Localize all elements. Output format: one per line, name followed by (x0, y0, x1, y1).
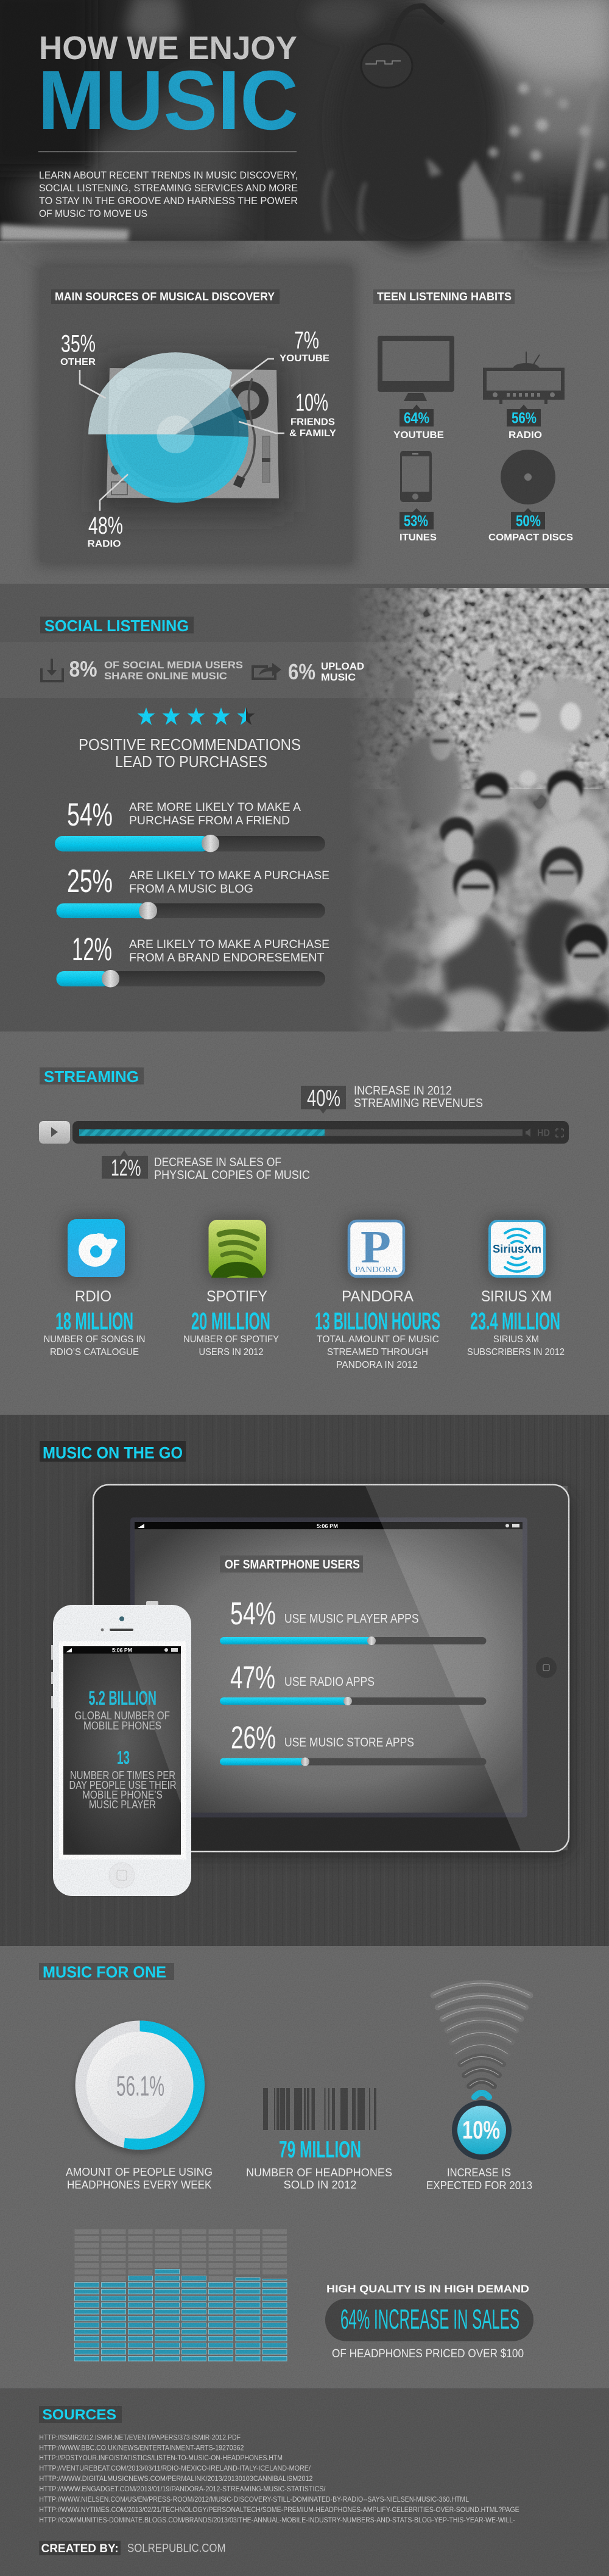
equalizer chart: filled cells (74, 2269, 287, 2361)
icon: barcode and 79 million: 79 MILLION (279, 2137, 361, 2163)
section: music for one (39, 1963, 533, 2361)
streaming progress bar (72, 1121, 569, 1144)
stat: 12 percent brand endorsement: 12% (72, 932, 112, 968)
stat: 5.2 billion mobile phones (74, 1687, 170, 1732)
pie slice: radio 48% (106, 434, 248, 503)
callout: radio 48% (88, 474, 128, 550)
icon: sirius xm logo (493, 1229, 541, 1272)
callout: other 35%: 35% (61, 330, 96, 357)
icon: rating stars (138, 707, 255, 725)
list of source urls: HTTP://COMMUNITIES-DOMINATE.BLOGS.COM/BRANDS/2013/03/THE-ANNUAL-MOBILE-INDUSTRY-NUMBERS-AND-STATS-BLOG-YEP-THIS-YEAR-WE-WILL- (39, 2516, 515, 2524)
smartphone: 5:06 PM (112, 1647, 132, 1654)
stat: 13 times per day: DAY PEOPLE USE THEIR (69, 1779, 177, 1791)
icon: pandora logo (355, 1222, 398, 1275)
callout: youtube 7% (231, 327, 329, 386)
stat: 54 percent music player apps: USE MUSIC PLAYER APPS (284, 1612, 419, 1626)
icon: compact disc (501, 450, 555, 504)
list of source urls: HTTP://VENTUREBEAT.COM/2013/03/11/RDIO-MEXICO-IRELAND-ITALY-ICELAND-MORE/ (39, 2464, 311, 2472)
gauge: 56.1 percent headphones every week: 56.1% (116, 2070, 164, 2102)
icon: share (253, 663, 281, 679)
intro text: SOCIAL LISTENING, STREAMING SERVICES AND MORE (39, 183, 298, 194)
stat: 13 times per day: MUSIC PLAYER (89, 1799, 156, 1811)
callout: high quality 64 percent increase in sales: HIGH QUALITY IS IN HIGH DEMAND (326, 2283, 529, 2295)
panel: main sources of musical discovery (37, 262, 356, 567)
app: sirius xm: SIRIUS XM (493, 1334, 539, 1345)
callout: other 35%: OTHER (60, 357, 96, 367)
stat: 26 percent music store apps: USE MUSIC STORE APPS (284, 1736, 414, 1750)
gauge: 56.1 percent headphones every week: HEADPHONES EVERY WEEK (67, 2179, 212, 2191)
stat: 54 percent friend: PURCHASE FROM A FRIEND (129, 814, 290, 827)
app: spotify: NUMBER OF SPOTIFY (183, 1334, 279, 1345)
gauge: 56.1 percent headphones every week (66, 2020, 213, 2191)
stat: 5.2 billion mobile phones: GLOBAL NUMBER OF (74, 1710, 170, 1722)
stat: 12 percent brand endorsement (56, 932, 329, 987)
icon: pandora logo: PANDORA (355, 1265, 398, 1275)
icon: barcode and 79 million: NUMBER OF HEADPHONES (246, 2167, 392, 2179)
app: rdio: NUMBER OF SONGS IN (44, 1334, 145, 1345)
section: social listening (0, 584, 609, 1039)
app: rdio (44, 1216, 145, 1357)
stat: itunes 53% (400, 508, 437, 543)
app: pandora (315, 1217, 440, 1370)
list of source urls: HTTP://WWW.ENGADGET.COM/2013/01/19/PANDORA-2012-STREAMING-MUSIC-STATISTICS/ (39, 2485, 326, 2493)
stat: 6 percent upload music: MUSIC (321, 672, 356, 683)
callout: 12 percent decrease: DECREASE IN SALES OF (154, 1156, 281, 1169)
stat: youtube 64%: YOUTUBE (393, 430, 444, 441)
stat: 6 percent upload music (288, 659, 364, 684)
stat: 6 percent upload music: 6% (288, 659, 315, 684)
app: rdio: 18 MILLION (55, 1308, 133, 1335)
title: How We Enjoy Music: HOW WE ENJOY (39, 30, 297, 66)
stat: 8 percent share online music: SHARE ONLINE MUSIC (104, 671, 227, 682)
app: pandora: TOTAL AMOUNT OF MUSIC (317, 1334, 439, 1345)
heading: music for one: MUSIC FOR ONE (43, 1963, 166, 1981)
icon: barcode and 79 million (246, 2088, 392, 2191)
stat: radio 56%: 56% (512, 410, 537, 427)
stat: 13 times per day: 13 (117, 1747, 130, 1768)
stat: itunes 53%: ITUNES (400, 533, 437, 543)
callout: friends and family 10%: 10% (295, 389, 328, 416)
heading: main sources: MAIN SOURCES OF MUSICAL DISCOVERY (55, 291, 275, 303)
stat: youtube 64% (393, 405, 444, 441)
app: spotify (183, 1217, 279, 1357)
callout: 40 percent increase (301, 1085, 483, 1114)
stat: compact discs 50%: COMPACT DISCS (488, 533, 573, 543)
list of source urls: HTTP://WWW.DIGITALMUSICNEWS.COM/PERMALINK/2013/20130103CANNIBALISM2012 (39, 2474, 313, 2483)
tablet glare (365, 1486, 568, 1850)
heading: of smartphone users: OF SMARTPHONE USERS (225, 1557, 360, 1572)
pie slice: friends and family 10% (175, 406, 248, 437)
text: positive recommendations: POSITIVE RECOMMENDATIONS (79, 735, 301, 754)
app: rdio: RDIO (75, 1288, 111, 1305)
tablet (91, 1485, 572, 1858)
stat: 25 percent music blog: 25% (67, 863, 113, 899)
callout: 12 percent decrease (102, 1150, 310, 1182)
stat: itunes 53%: 53% (404, 513, 428, 530)
app: spotify: SPOTIFY (206, 1288, 267, 1305)
callout: 12 percent decrease: PHYSICAL COPIES OF MUSIC (154, 1169, 310, 1182)
stat: 25 percent music blog (56, 863, 329, 919)
stat: 26 percent music store apps: 26% (231, 1721, 276, 1756)
heading: teen listening habits: TEEN LISTENING HABITS (377, 291, 512, 303)
stat: 6 percent upload music: UPLOAD (321, 661, 364, 672)
callout: friends and family 10%: & FAMILY (289, 428, 337, 439)
icon: sirius xm logo: SiriusXm (493, 1243, 541, 1255)
stat: 8 percent share online music: 8% (69, 657, 97, 682)
stat: compact discs 50% (488, 508, 573, 543)
stat: 5.2 billion mobile phones: 5.2 BILLION (89, 1687, 157, 1709)
header photo: DJ with headphones (0, 0, 609, 250)
pie chart: discovery sources (88, 352, 248, 503)
stat: compact discs 50%: 50% (516, 513, 541, 530)
app: sirius xm: SIRIUS XM (481, 1288, 552, 1305)
stat: 47 percent radio apps: USE RADIO APPS (284, 1675, 375, 1689)
callout: friends and family 10% (239, 389, 337, 439)
callout: youtube 7%: 7% (294, 327, 319, 354)
callout: youtube 7%: YOUTUBE (280, 353, 329, 364)
stat: 25 percent music blog: ARE LIKELY TO MAKE A PURCHASE (129, 869, 329, 882)
section: music on the go (0, 1415, 609, 1946)
stat: 12 percent brand endorsement: ARE LIKELY TO MAKE A PURCHASE (129, 938, 329, 951)
icon: signal waves with 10 percent: INCREASE IS (447, 2167, 511, 2179)
intro text: OF MUSIC TO MOVE US (39, 208, 147, 219)
icon: download (41, 659, 63, 681)
pie slice: youtube 7% (175, 387, 241, 434)
tablet: 5:06 PM (317, 1523, 338, 1530)
icon: play button (39, 1121, 70, 1144)
text: positive recommendations: LEAD TO PURCHASES (115, 752, 267, 771)
stat: 47 percent radio apps (220, 1660, 486, 1705)
icon: signal waves with 10 percent: 10% (462, 2115, 500, 2144)
equalizer chart: empty cells (74, 2229, 287, 2281)
app: rdio: RDIO’S CATALOGUE (50, 1347, 139, 1357)
stat: 54 percent friend: 54% (67, 797, 113, 833)
icon: retro television (483, 352, 565, 404)
photo: festival crowd (341, 588, 609, 1039)
callout: high quality 64 percent increase in sales: OF HEADPHONES PRICED OVER $100 (332, 2348, 524, 2360)
gauge: 56.1 percent headphones every week: AMOUNT OF PEOPLE USING (66, 2166, 213, 2178)
section: streaming (39, 1067, 569, 1370)
streaming progress bar: HD (537, 1128, 550, 1138)
icon: spotify logo (211, 1232, 263, 1278)
app: spotify: 20 MILLION (191, 1308, 270, 1335)
stat: 12 percent brand endorsement: FROM A BRAND ENDORESEMENT (129, 951, 325, 964)
stat: radio 56%: RADIO (509, 430, 542, 441)
section: sources (0, 2388, 609, 2576)
credit: created by solrepublic.com: SOLREPUBLIC.COM (127, 2542, 225, 2555)
list of source urls: HTTP://WWW.BBC.CO.UK/NEWS/ENTERTAINMENT-ARTS-19270362 (39, 2443, 244, 2452)
callout: radio 48%: 48% (88, 512, 123, 539)
list of source urls: HTTP://ISMIR2012.ISMIR.NET/EVENT/PAPERS/373-ISMIR-2012.PDF (39, 2433, 241, 2442)
text: positive recommendations (79, 735, 301, 771)
callout: friends and family 10%: FRIENDS (290, 417, 335, 428)
intro text: LEARN ABOUT RECENT TRENDS IN MUSIC DISCOVERY, (39, 170, 298, 181)
intro text (39, 170, 298, 219)
pie slice: other 35% (88, 352, 232, 434)
icon: barcode and 79 million: SOLD IN 2012 (284, 2179, 357, 2191)
stat: 8 percent share online music (69, 657, 243, 682)
stat: 54 percent music player apps: 54% (230, 1596, 276, 1632)
crowd faces (453, 859, 498, 908)
icon: rdio logo (79, 1233, 118, 1267)
crowd bodies (443, 917, 519, 1033)
app: pandora: 13 BILLION HOURS (315, 1308, 440, 1335)
icon: pandora logo: P (361, 1222, 391, 1273)
icon: signal waves with 10 percent: EXPECTED FOR 2013 (426, 2179, 532, 2192)
intro text: TO STAY IN THE GROOVE AND HARNESS THE POWER (39, 196, 298, 207)
app: pandora: STREAMED THROUGH (327, 1347, 428, 1357)
list of source urls (39, 2433, 519, 2524)
icon: headphones (361, 6, 443, 88)
stat: 54 percent friend (55, 797, 325, 852)
callout: 40 percent increase: INCREASE IN 2012 (354, 1085, 452, 1098)
callout: radio 48%: RADIO (88, 539, 121, 550)
panel: teen listening habits (373, 289, 573, 543)
stat: 26 percent music store apps (220, 1721, 486, 1766)
stat: 13 times per day: NUMBER OF TIMES PER (70, 1769, 175, 1782)
heading: music on the go: MUSIC ON THE GO (43, 1444, 183, 1462)
callout: 40 percent increase: STREAMING REVENUES (354, 1097, 483, 1110)
stat: youtube 64%: 64% (404, 410, 429, 427)
smartphone (51, 1601, 191, 1896)
heading: streaming: STREAMING (44, 1067, 139, 1086)
app: sirius xm (467, 1217, 565, 1357)
list of source urls: HTTP://POSTYOUR.INFO/STATISTICS/LISTEN-TO-MUSIC-ON-HEADPHONES.HTM (39, 2454, 283, 2462)
app: spotify: USERS IN 2012 (199, 1347, 264, 1357)
app: pandora: PANDORA (342, 1288, 414, 1305)
stat: radio 56% (507, 405, 542, 441)
title: How We Enjoy Music: MUSIC (38, 54, 298, 147)
stat: 25 percent music blog: FROM A MUSIC BLOG (129, 882, 253, 896)
credit: created by solrepublic.com (39, 2541, 226, 2555)
list of source urls: HTTP://WWW.NIELSEN.COM/US/EN/PRESS-ROOM/2012/MUSIC-DISCOVERY-STILL-DOMINATED-BY-RADIO--SAYS-NIELSEN-MUSIC-360.HTML (39, 2495, 469, 2503)
stat: 5.2 billion mobile phones: MOBILE PHONES (83, 1719, 161, 1732)
heading: social listening: SOCIAL LISTENING (44, 617, 189, 635)
callout: other 35% (60, 330, 106, 398)
list of source urls: HTTP://WWW.NYTIMES.COM/2013/02/21/TECHNOLOGY/PERSONALTECH/SOME-PREMIUM-HEADPHONES-AMPLIFY-CELEBRITIES-OVER-SOUND.HTML?PAGE (39, 2505, 519, 2514)
stat: 47 percent radio apps: 47% (230, 1660, 275, 1696)
callout: 12 percent decrease: 12% (111, 1156, 141, 1181)
credit: created by solrepublic.com: CREATED BY: (41, 2542, 119, 2555)
icon: smartphone (400, 451, 432, 502)
stat: 8 percent share online music: OF SOCIAL MEDIA USERS (104, 660, 243, 671)
icon: computer monitor (378, 336, 454, 401)
app: pandora: PANDORA IN 2012 (336, 1360, 418, 1370)
stat: 54 percent music player apps (220, 1596, 486, 1645)
turntable illustration (97, 363, 289, 512)
stat: 13 times per day: MOBILE PHONE’S (82, 1789, 163, 1801)
stat: 13 times per day (69, 1747, 177, 1811)
app: sirius xm: SUBSCRIBERS IN 2012 (467, 1347, 565, 1357)
callout: high quality 64 percent increase in sales (325, 2283, 533, 2360)
icon: signal waves with 10 percent (426, 1983, 532, 2192)
heading: sources: SOURCES (43, 2407, 116, 2423)
stat: 54 percent friend: ARE MORE LIKELY TO MAKE A (129, 801, 301, 814)
callout: 40 percent increase: 40% (307, 1086, 340, 1111)
